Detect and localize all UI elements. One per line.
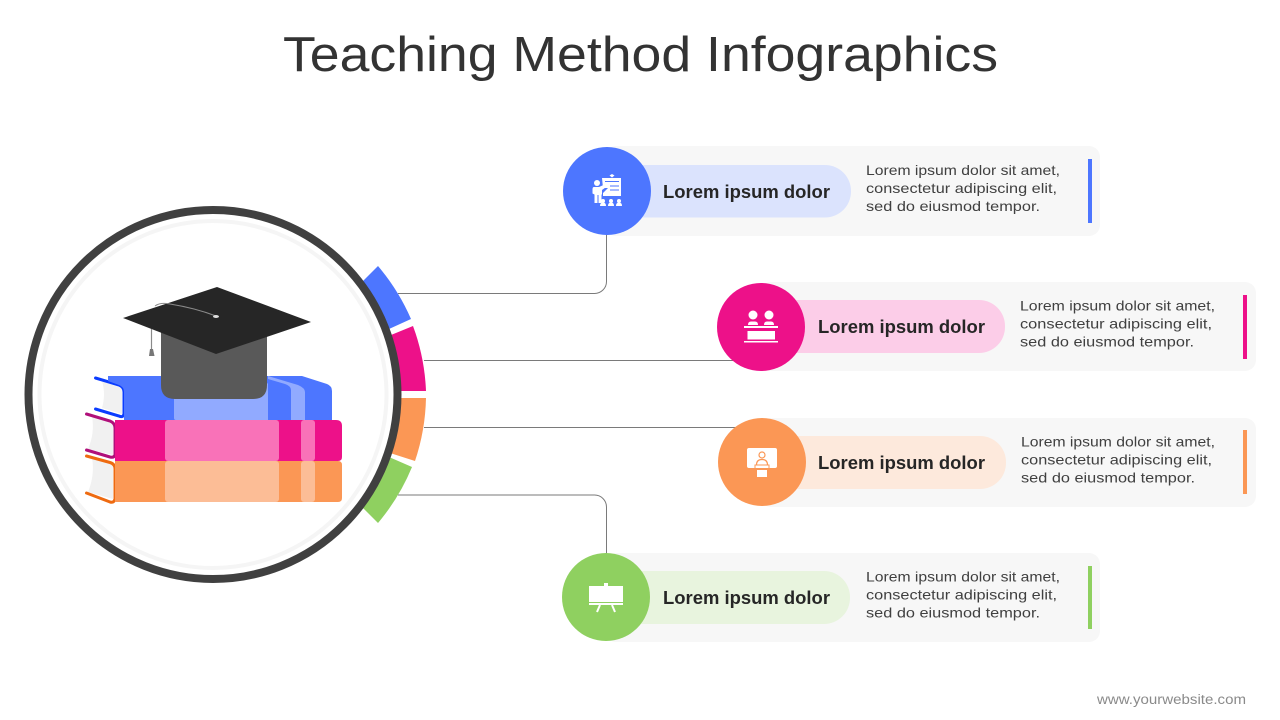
label: item 3: Lorem ipsum dolor xyxy=(818,452,985,473)
icon circle: speaker at podium on screen xyxy=(718,418,806,506)
text: item 2: sed do eiusmod tempor. xyxy=(1020,334,1194,350)
main circle xyxy=(28,210,398,579)
book: blue xyxy=(96,376,332,420)
accent bar: item 3 xyxy=(1243,430,1247,494)
text: item 1: Lorem ipsum dolor sit amet, xyxy=(866,162,1060,178)
text: item 1 xyxy=(866,162,1060,214)
title: Teaching Method Infographics xyxy=(283,28,998,82)
panel: item 1 xyxy=(563,146,1100,236)
text: item 4 xyxy=(866,568,1060,620)
pill: item 1 xyxy=(610,165,851,218)
text: item 3: Lorem ipsum dolor sit amet, xyxy=(1021,434,1215,450)
accent bar: item 2 xyxy=(1243,295,1247,359)
text: item 3: consectetur adipiscing elit, xyxy=(1021,452,1212,468)
text: item 4: sed do eiusmod tempor. xyxy=(866,604,1040,620)
graduation cap xyxy=(123,287,311,399)
text: item 1: sed do eiusmod tempor. xyxy=(866,198,1040,214)
footer url: www.yourwebsite.com xyxy=(1096,692,1246,707)
pill: item 2 xyxy=(765,300,1005,353)
text: item 2: Lorem ipsum dolor sit amet, xyxy=(1020,298,1215,314)
accent bar: item 1 xyxy=(1088,159,1092,223)
arc segments around circle xyxy=(360,266,426,523)
icon circle: two people at desk xyxy=(717,283,805,371)
text: item 1: consectetur adipiscing elit, xyxy=(866,180,1057,196)
label: item 2: Lorem ipsum dolor xyxy=(818,316,985,337)
icon circle: presentation board xyxy=(562,553,650,641)
book: orange xyxy=(86,456,342,502)
connector lines xyxy=(398,232,740,556)
panel: item 4 xyxy=(562,553,1100,642)
text: item 3: sed do eiusmod tempor. xyxy=(1021,470,1195,486)
text: item 4: consectetur adipiscing elit, xyxy=(866,586,1057,602)
text: item 2: consectetur adipiscing elit, xyxy=(1020,316,1212,332)
text: item 3 xyxy=(1021,434,1215,486)
book: pink xyxy=(86,414,342,461)
panel: item 2 xyxy=(717,282,1256,371)
illustration: books and graduation cap xyxy=(86,287,342,502)
label: item 1: Lorem ipsum dolor xyxy=(663,181,830,202)
pill: item 4 xyxy=(610,571,850,624)
icon circle: presenter with board xyxy=(563,147,651,235)
pill: item 3 xyxy=(765,436,1006,489)
accent bar: item 4 xyxy=(1088,566,1092,629)
text: item 4: Lorem ipsum dolor sit amet, xyxy=(866,568,1060,584)
text: item 2 xyxy=(1020,298,1215,350)
label: item 4: Lorem ipsum dolor xyxy=(663,587,830,608)
panel: item 3 xyxy=(718,418,1256,507)
